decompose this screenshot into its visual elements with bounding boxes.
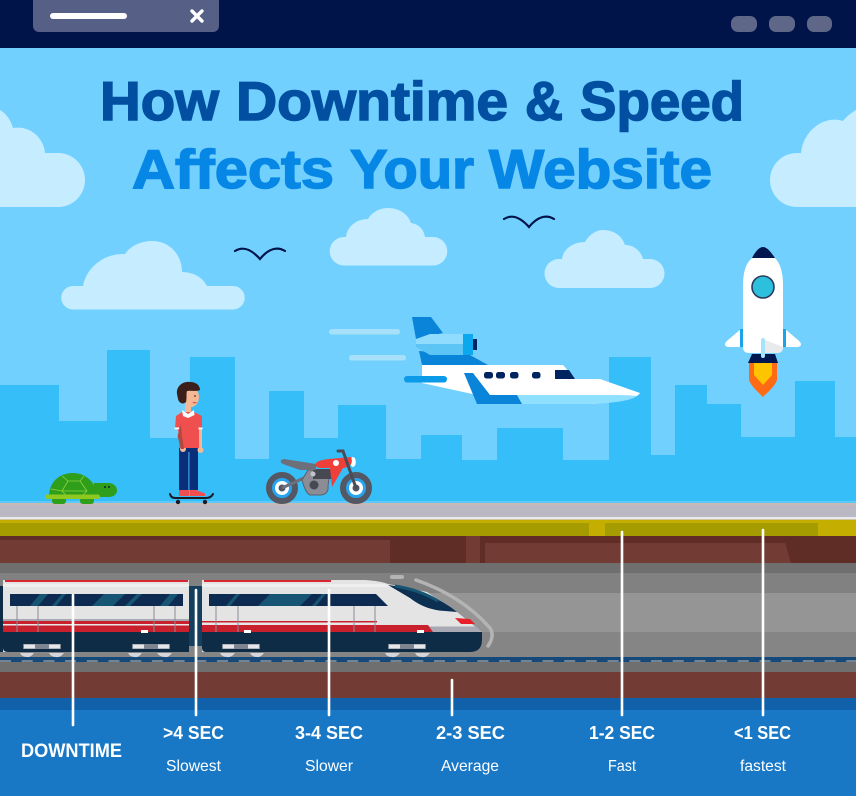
label: >4 sec slowest: >4 SEC [163, 723, 224, 743]
train [0, 577, 492, 657]
bottom band [0, 698, 856, 796]
cloud: top centre [330, 208, 447, 266]
tunnel [0, 563, 856, 657]
turtle [45, 473, 117, 504]
browser bar [0, 0, 856, 48]
brown soil layer upper [0, 536, 856, 563]
road [0, 501, 856, 520]
cloud: right middle [544, 230, 664, 288]
motorcycle [269, 451, 369, 501]
title: Website [489, 138, 712, 200]
yellow ground layer [0, 520, 856, 536]
label: <1 sec fastest [734, 723, 791, 775]
train car rear [3, 580, 189, 657]
cloud: right [770, 110, 856, 207]
icon: bird right [504, 217, 554, 227]
title: How [100, 70, 219, 132]
title: Your [350, 138, 474, 200]
label: 1-2 sec fast: Fast [608, 758, 636, 775]
label: >4 sec slowest [163, 723, 224, 775]
label: <1 sec fastest: fastest [740, 758, 787, 775]
label: >4 sec slowest: Slowest [166, 758, 222, 775]
sky background [0, 48, 856, 504]
title: Speed [580, 70, 744, 132]
title [100, 70, 744, 200]
title: Downtime [236, 70, 508, 132]
label: 3-4 sec slower: 3-4 SEC [295, 723, 363, 743]
cloud: left middle [61, 241, 245, 310]
label: 3-4 sec slower [295, 723, 363, 775]
label: 2-3 sec average: Average [441, 758, 499, 775]
brown soil layer lower [0, 672, 856, 698]
label: 3-4 sec slower: Slower [305, 758, 354, 775]
cloud: left [0, 110, 85, 207]
person on skateboard [170, 382, 213, 504]
icon: rocket [725, 247, 801, 397]
rail track [0, 657, 856, 672]
icon: jet plane [404, 317, 640, 404]
icon: bird left [235, 249, 285, 259]
label: downtime: DOWNTIME [21, 741, 122, 762]
marker lines [73, 530, 763, 725]
title: & [525, 70, 563, 132]
label: 1-2 sec fast: 1-2 SEC [589, 723, 655, 743]
label: 1-2 sec fast [589, 723, 655, 775]
label: <1 sec fastest: <1 SEC [734, 723, 791, 743]
label: 2-3 sec average [436, 723, 505, 775]
title: Affects [132, 138, 334, 200]
speed lines [329, 329, 406, 360]
city skyline [0, 350, 856, 504]
label: 2-3 sec average: 2-3 SEC [436, 723, 505, 743]
train car front [202, 577, 492, 657]
